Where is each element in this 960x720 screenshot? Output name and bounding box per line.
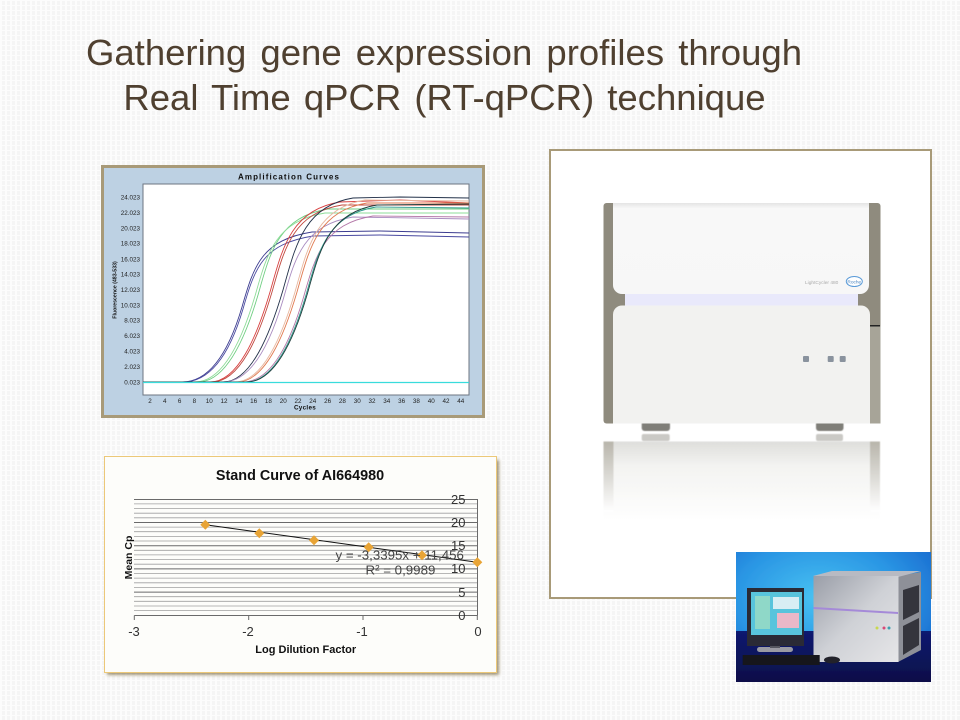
- x axis tick labels: 42: [442, 398, 450, 405]
- instrument body: [604, 203, 880, 424]
- x axis tick labels: 0: [474, 624, 482, 639]
- panel: instrument photo: [550, 150, 931, 598]
- x axis tick labels: 40: [428, 398, 435, 405]
- x axis tick labels: 6: [178, 398, 182, 405]
- y axis tick labels: 5: [458, 585, 466, 600]
- x axis tick labels: -3: [128, 624, 140, 639]
- x axis tick labels: 24: [309, 398, 317, 405]
- y axis tick labels: 14.023: [121, 272, 140, 279]
- x axis tick labels: 34: [383, 398, 391, 405]
- y axis title: Mean Cp: [123, 536, 135, 579]
- x axis tick labels: 10: [206, 398, 213, 405]
- chart title: Stand Curve of AI664980: [216, 468, 384, 484]
- y axis tick labels: 20: [451, 515, 466, 530]
- instrument reflection: [604, 434, 880, 522]
- x axis tick labels: 38: [413, 398, 420, 405]
- x axis tick labels: 18: [265, 398, 272, 405]
- y axis title: Fluorescence (483-533): [112, 261, 118, 319]
- trend equation: R² = 0,9989: [366, 562, 435, 578]
- y axis tick labels: 6.023: [124, 333, 140, 340]
- minor gridlines: [134, 504, 477, 611]
- x axis tick labels: [148, 398, 465, 405]
- x axis tick labels: -2: [242, 624, 254, 639]
- x axis tick labels: 22: [294, 398, 302, 405]
- title: [86, 32, 802, 118]
- floor: [736, 631, 931, 682]
- y axis tick labels: 0: [458, 608, 466, 623]
- x axis tick labels: 44: [457, 398, 465, 405]
- trend equation: [336, 548, 464, 578]
- amplification curve lines: [143, 197, 469, 382]
- panel: standard curve chart: [104, 456, 499, 675]
- title: Real Time qPCR (RT-qPCR) technique: [123, 77, 766, 118]
- x axis tick labels: 12: [220, 398, 228, 405]
- x axis tick labels: 20: [280, 398, 287, 405]
- data points: [200, 520, 482, 567]
- instrument: [813, 571, 921, 662]
- trend equation: y = -3,3395x + 11,456: [336, 548, 464, 562]
- lower door: [613, 306, 870, 424]
- y axis tick labels: 20.023: [121, 225, 140, 232]
- y axis tick labels: [121, 194, 140, 386]
- x axis title: Log Dilution Factor: [255, 644, 357, 656]
- y axis tick labels: [451, 492, 466, 623]
- x axis tick labels: 28: [339, 398, 346, 405]
- y axis tick labels: 10.023: [121, 302, 140, 309]
- keyboard: [743, 655, 820, 665]
- Roche logo: [846, 276, 862, 286]
- title: Gathering gene expression profiles through: [86, 32, 802, 73]
- y axis tick labels: 15: [451, 538, 466, 553]
- light band: [625, 293, 858, 306]
- x axis tick labels: 36: [398, 398, 406, 405]
- y axis tick labels: 22.023: [121, 210, 140, 217]
- status buttons: [803, 356, 846, 362]
- major gridlines and axes: [134, 499, 478, 620]
- chart title: Amplification Curves: [238, 172, 340, 182]
- y axis tick labels: 10: [451, 561, 466, 576]
- x axis tick labels: 14: [235, 398, 243, 405]
- x axis tick labels: 8: [193, 398, 197, 405]
- instrument feet: [642, 421, 844, 431]
- x axis tick labels: -1: [356, 624, 368, 639]
- y axis tick labels: 24.023: [121, 194, 140, 202]
- photo: instrument with computer workstation: [736, 552, 931, 682]
- x axis tick labels: 32: [368, 398, 376, 405]
- y axis tick labels: 0.023: [124, 379, 140, 386]
- computer monitor: [747, 588, 804, 652]
- y axis tick labels: 4.023: [124, 348, 140, 355]
- Roche logo: Roche: [847, 279, 862, 285]
- x axis tick labels: 26: [324, 398, 332, 405]
- y axis tick labels: 2.023: [124, 364, 140, 371]
- x axis tick labels: 4: [163, 398, 167, 405]
- y axis tick labels: 16.023: [121, 256, 140, 263]
- product name: LightCycler 480: [805, 280, 839, 286]
- x axis tick labels: [128, 624, 482, 639]
- x axis tick labels: 16: [250, 398, 258, 405]
- x axis title: Cycles: [294, 404, 316, 412]
- trend line: [205, 525, 477, 562]
- panel: amplification curves chart: [102, 166, 484, 416]
- side slot: [870, 325, 880, 326]
- y axis tick labels: 25: [451, 492, 466, 507]
- plot area: [143, 184, 469, 395]
- x axis tick labels: 2: [148, 398, 152, 405]
- x axis tick labels: 30: [354, 398, 361, 405]
- y axis tick labels: 18.023: [121, 241, 140, 248]
- y axis tick labels: 8.023: [124, 318, 140, 325]
- y axis tick labels: 12.023: [121, 287, 140, 294]
- mouse: [824, 656, 840, 664]
- upper door: [613, 203, 869, 294]
